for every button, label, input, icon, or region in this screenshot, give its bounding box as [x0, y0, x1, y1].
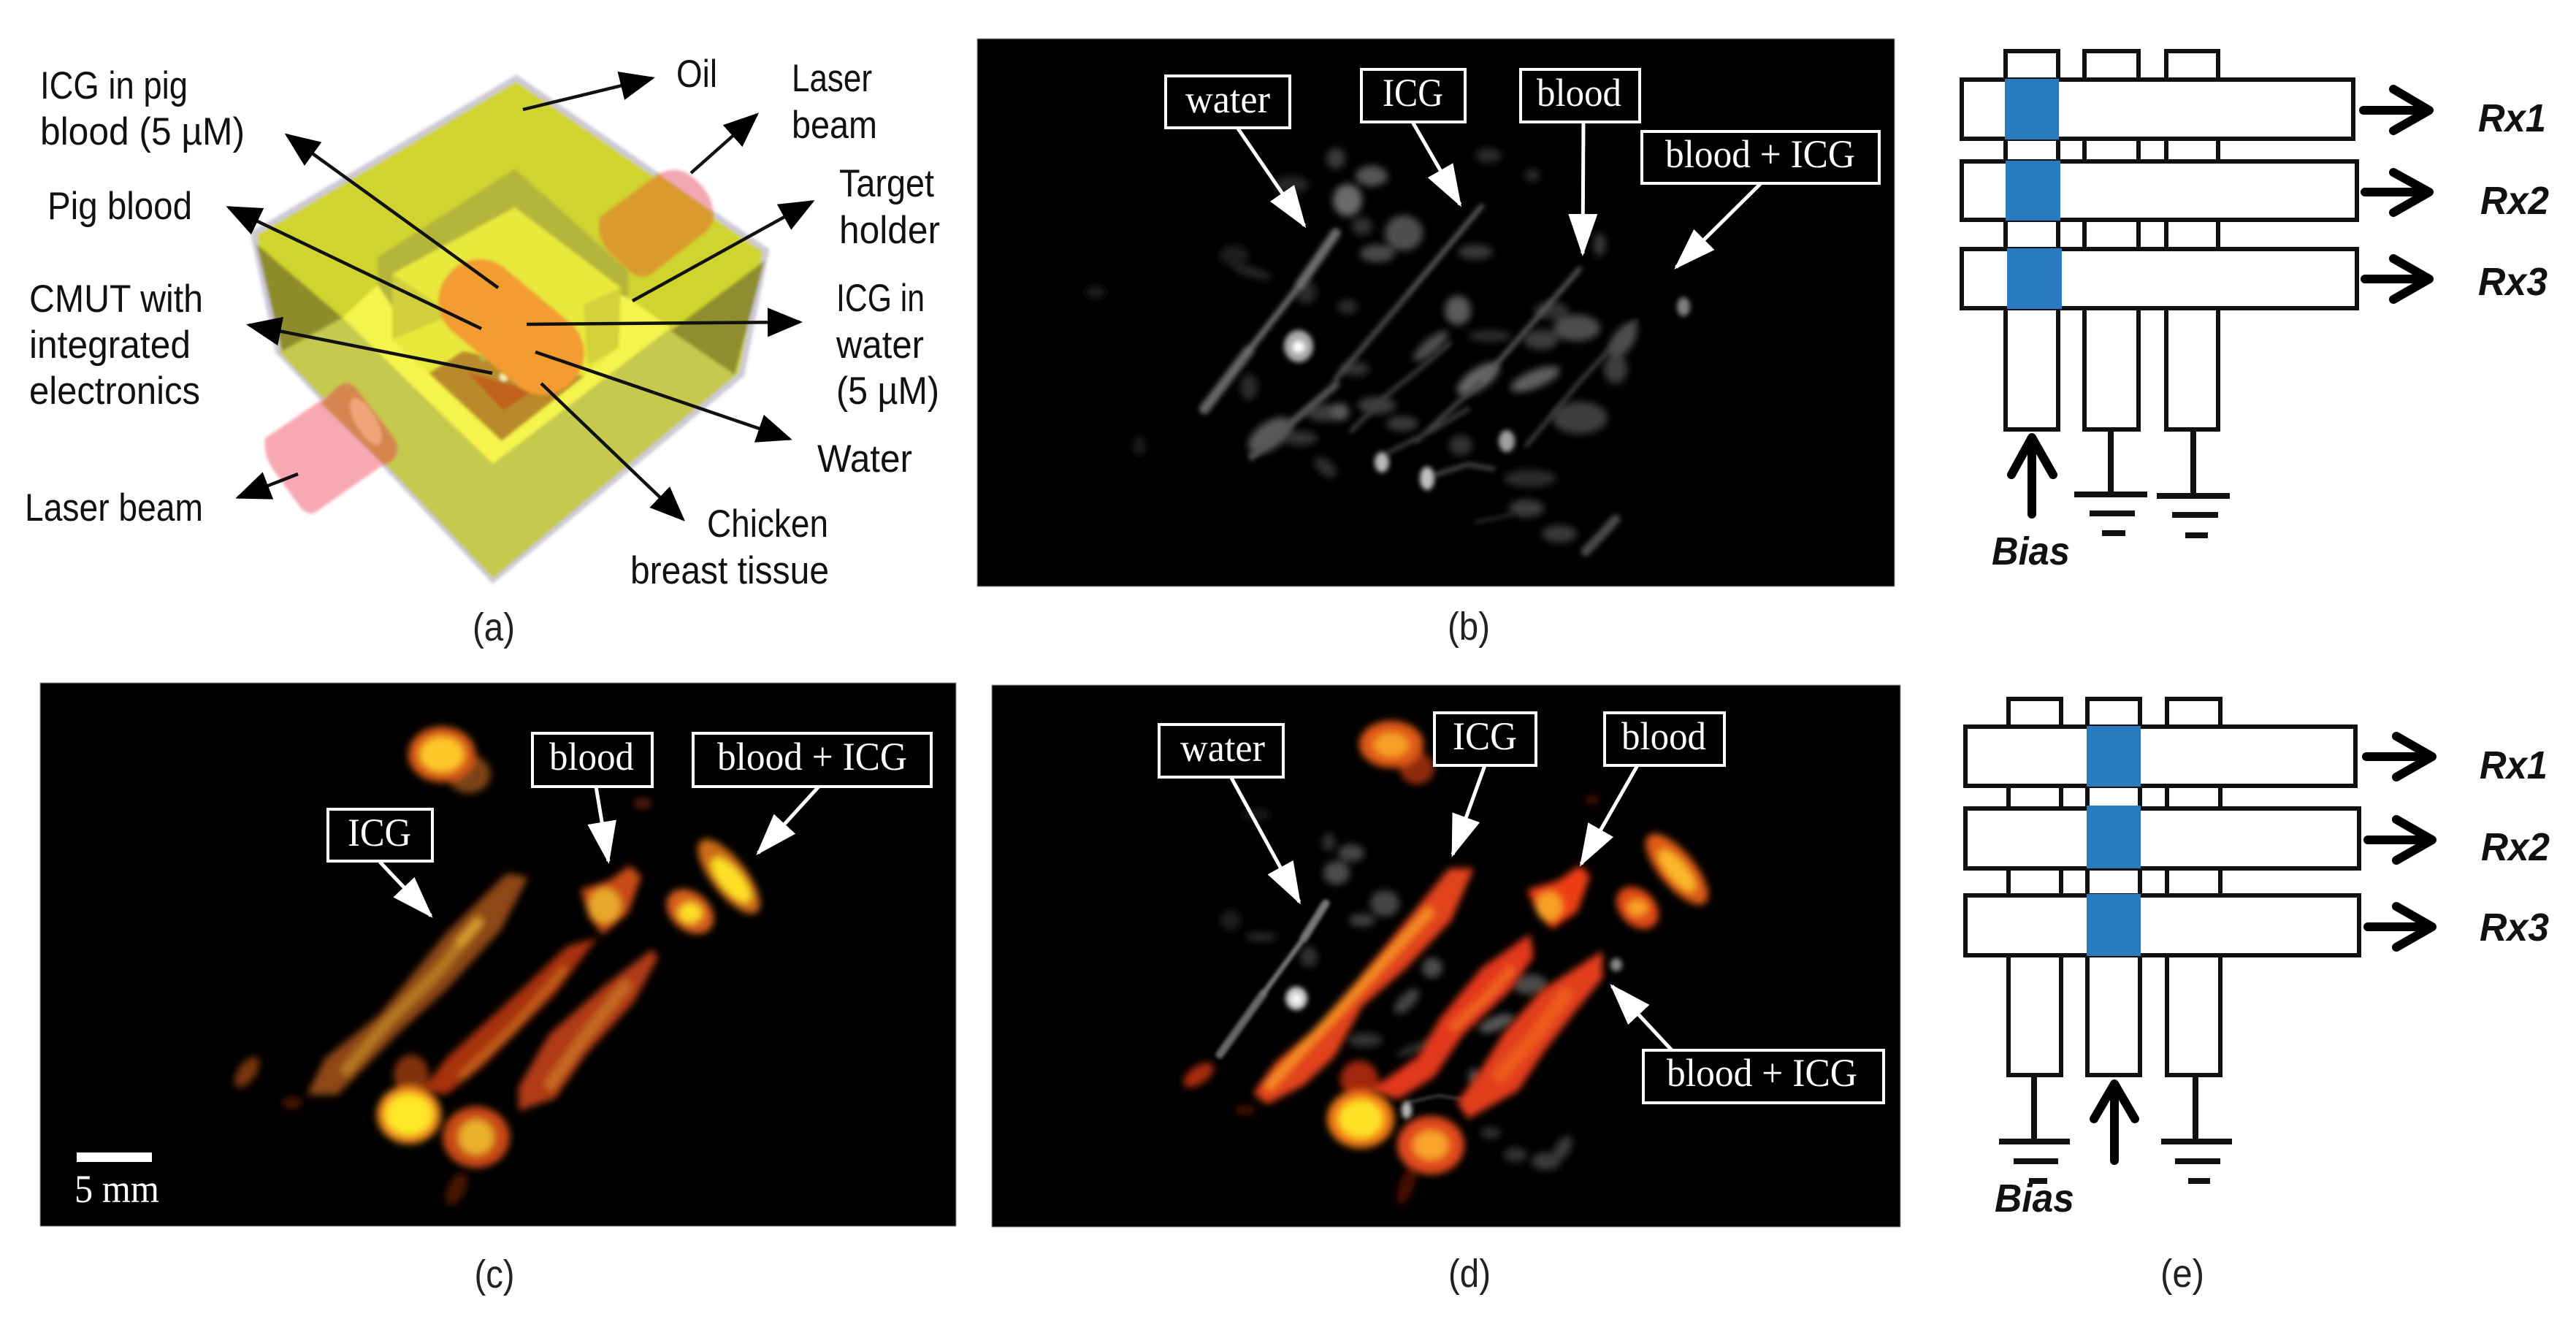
panel e1: electrode schematic, column 1 biased	[1962, 51, 2549, 573]
heat blobs	[377, 727, 771, 1168]
bias arrow	[1995, 1084, 2135, 1220]
caption (e): (e)	[2160, 1252, 2204, 1296]
grayscale streak	[1220, 903, 1461, 1103]
arrows and labels: ICG in	[836, 277, 925, 320]
label: ICG	[328, 809, 432, 916]
arrows and labels	[25, 53, 940, 592]
arrows and labels: ICG in pig	[40, 64, 188, 107]
label: blood + ICG: blood + ICG	[1667, 1051, 1857, 1095]
arrows and labels: integrated	[29, 324, 191, 367]
caption (b): (b)	[1448, 605, 1490, 649]
caption (d): (d)	[1448, 1252, 1491, 1296]
arrows and labels: Water	[817, 437, 912, 481]
ground symbols	[1999, 1075, 2232, 1181]
receive bars	[1965, 727, 2359, 955]
label: water: water	[1180, 726, 1265, 770]
CMUT dots	[479, 354, 508, 381]
label: ICG: ICG	[348, 811, 411, 855]
ground symbols	[2074, 429, 2230, 535]
Rx outputs	[2366, 736, 2550, 949]
heat streaks	[1179, 868, 1602, 1207]
arrows and labels: electronics	[29, 370, 200, 413]
label: water	[1159, 725, 1299, 902]
label: blood + ICG	[693, 733, 931, 853]
label: ICG	[1361, 69, 1465, 204]
label: blood + ICG: blood + ICG	[717, 735, 907, 779]
label: blood: blood	[1537, 71, 1621, 115]
target capsule	[422, 243, 600, 411]
grayscale bright spots	[1285, 958, 1622, 1119]
bias arrow: Bias	[1995, 1177, 2074, 1220]
panel b: grayscale image	[977, 39, 1895, 586]
vertical electrodes	[2006, 51, 2218, 429]
Rx outputs: Rx2	[2481, 825, 2550, 869]
grayscale background	[1220, 809, 1576, 1170]
panel a: 3D phantom diagram	[25, 53, 940, 592]
arrows and labels: Laser beam	[25, 486, 203, 529]
arrows and labels: Target	[839, 162, 934, 205]
grayscale streaks	[1204, 206, 1636, 551]
caption (a): (a)	[473, 605, 515, 649]
label: blood + ICG	[1612, 986, 1884, 1103]
scale bar: 5 mm	[74, 1167, 159, 1211]
label: blood + ICG	[1642, 131, 1879, 267]
caption (c): (c)	[475, 1253, 514, 1296]
label: water: water	[1185, 77, 1270, 121]
heat blobs	[1327, 721, 1719, 1174]
chicken breast tissue	[429, 351, 584, 440]
label: ICG	[1434, 713, 1536, 855]
laser beam upper right	[599, 169, 714, 277]
label: ICG: ICG	[1383, 71, 1443, 115]
vertical electrodes	[2009, 699, 2220, 1075]
label: blood + ICG: blood + ICG	[1665, 132, 1855, 176]
label: blood	[1581, 713, 1724, 864]
label: blood	[1521, 69, 1640, 253]
laser beam lower left	[264, 383, 397, 513]
label: water	[1166, 76, 1304, 226]
panel d: overlay image	[992, 685, 1900, 1227]
label: blood	[532, 733, 652, 861]
arrows and labels: (5 µM)	[836, 370, 939, 413]
Rx outputs: Rx3	[2478, 260, 2548, 304]
label: blood: blood	[549, 735, 634, 779]
bias arrow: Bias	[1992, 529, 2070, 573]
blue overlaps	[2005, 79, 2062, 309]
arrows and labels: Laser	[792, 57, 872, 100]
Rx outputs: Rx3	[2480, 906, 2549, 949]
receive bars	[1962, 80, 2357, 308]
Rx outputs	[2363, 89, 2549, 304]
label: ICG: ICG	[1453, 714, 1517, 758]
grayscale clouds	[1085, 148, 1643, 543]
arrows and labels: beam	[792, 104, 877, 147]
Rx outputs: Rx2	[2480, 179, 2549, 223]
panel c: photoacoustic image	[40, 683, 956, 1226]
arrows and labels: CMUT with	[29, 278, 203, 321]
arrows and labels: holder	[839, 209, 940, 252]
arrows and labels: blood (5 µM)	[40, 110, 245, 153]
arrows and labels: breast tissue	[630, 549, 829, 592]
heat streaks	[229, 873, 658, 1209]
arrows and labels: Chicken	[707, 502, 828, 546]
blue overlaps	[2087, 726, 2141, 956]
oil tank box	[253, 78, 766, 580]
Rx outputs: Rx1	[2478, 96, 2546, 140]
Rx outputs: Rx1	[2480, 743, 2548, 787]
bright spots	[1284, 297, 1690, 490]
bias arrow	[1992, 437, 2070, 573]
arrows and labels: Oil	[676, 53, 717, 96]
label: blood: blood	[1621, 714, 1706, 758]
arrows and labels: Pig blood	[47, 185, 192, 228]
arrows and labels: water	[836, 324, 924, 367]
panel e2: electrode schematic, column 2 biased	[1965, 699, 2550, 1220]
